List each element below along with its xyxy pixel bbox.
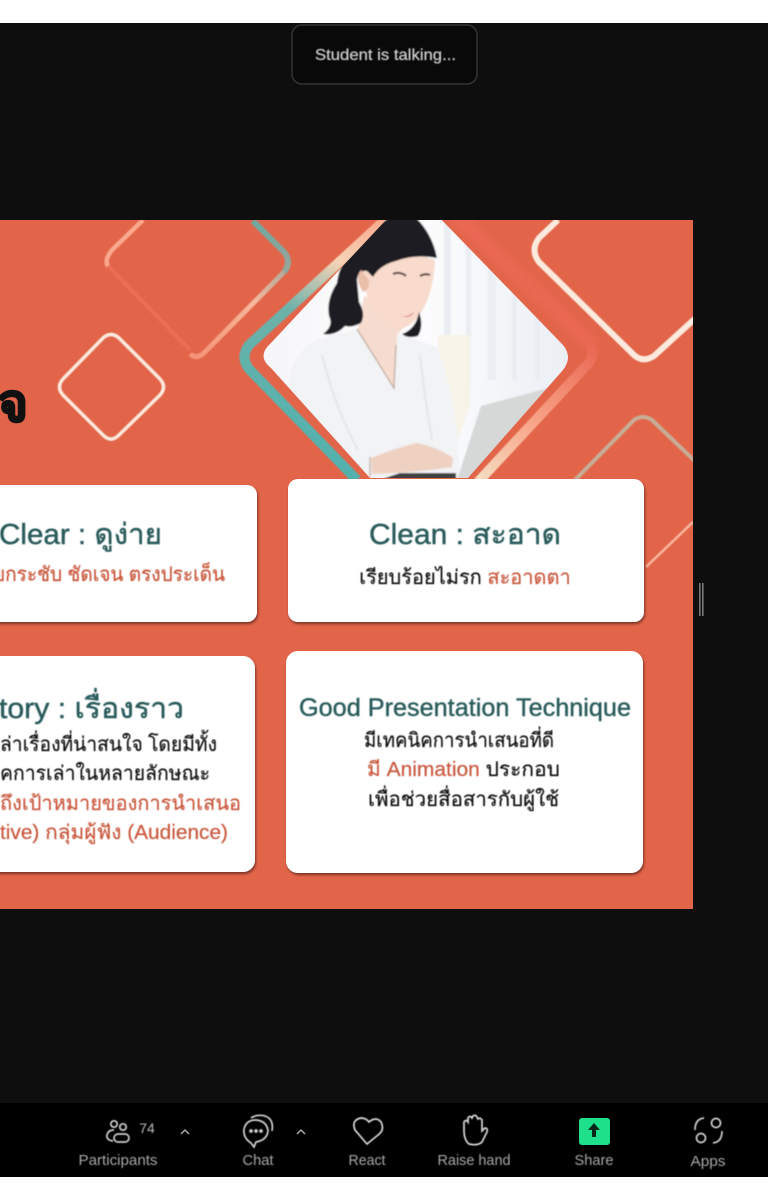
card text: Good Presentation heading: Good Presentation Technique — [299, 694, 631, 722]
panel resize handle — [699, 583, 704, 616]
decorative tile: small outlined diamond — [60, 334, 164, 439]
photo frame strip: teal and gold — [244, 220, 385, 480]
decorative tile: upper left diamond — [107, 220, 288, 357]
decorative faint line — [646, 522, 693, 567]
photo frame strip: coral and gold — [478, 345, 592, 482]
participant count: 74 — [139, 1120, 155, 1136]
toolbar labels — [78, 1152, 726, 1170]
card text: Clear body: ยกระชับ ชัดเจน ตรงประเด็น — [0, 561, 225, 586]
icon: raise hand — [464, 1115, 487, 1145]
speaking indicator — [292, 25, 477, 84]
card text: Story body: ถึงเป้าหมายของการนำเสนอ — [0, 793, 241, 815]
card text: Good Presentation body: มี Animation ประกอบ — [367, 759, 560, 781]
icon: participants menu caret — [181, 1130, 189, 1134]
card: Story — [0, 656, 255, 872]
icon: react heart — [354, 1118, 382, 1144]
coral band beside photo — [455, 215, 592, 345]
card text: Clean body: เรียบร้อยไม่รก สะอาดตา — [359, 566, 571, 589]
card text: Clear heading: Clear : ดูง่าย — [0, 519, 162, 552]
icon: participants — [107, 1121, 129, 1142]
card text: Story body — [0, 730, 241, 845]
icon: apps — [695, 1118, 722, 1143]
laptop — [457, 387, 552, 480]
woman's blouse — [336, 330, 458, 478]
decorative tile: top right outline — [534, 220, 700, 359]
icon: chat — [244, 1115, 272, 1147]
card text: Story body: ล่าเรื่องที่น่าสนใจ โดยมีทั้ง — [0, 730, 217, 756]
card text: Good Presentation body: เพื่อช่วยสื่อสารกับผู้ใช้ — [368, 785, 559, 812]
speaking indicator: Student is talking... — [315, 47, 456, 64]
slide — [0, 190, 700, 909]
photo: woman with laptop — [264, 220, 568, 478]
icon: share — [579, 1118, 610, 1145]
woman's head — [360, 254, 435, 329]
card text: Story body: tive) กลุ่มผู้ฟัง (Audience) — [0, 822, 228, 845]
card: Clear — [0, 485, 257, 622]
card text: Story heading: tory : เรื่องราว — [0, 688, 184, 725]
card: Clean — [288, 479, 644, 622]
toolbar labels: Chat — [242, 1152, 274, 1169]
icon: chat menu caret — [297, 1130, 305, 1134]
card text: Clean heading: Clean : สะอาด — [369, 519, 561, 551]
card text: Story body: คการเล่าในหลายลักษณะ — [0, 762, 210, 785]
woman's neck — [358, 296, 403, 386]
toolbar labels: Raise hand — [438, 1152, 510, 1169]
woman's hair — [323, 215, 437, 334]
toolbar — [0, 1103, 768, 1177]
card text: Good Presentation body: มีเทคนิคการนำเสนอที่ดี — [364, 726, 554, 752]
woman's hands — [371, 443, 453, 474]
toolbar labels: Share — [574, 1152, 614, 1169]
toolbar labels: Apps — [690, 1153, 726, 1170]
decorative tile: lower right outline — [575, 417, 700, 480]
card: Good Presentation Technique — [286, 651, 643, 873]
toolbar labels: Participants — [78, 1152, 158, 1169]
toolbar labels: React — [348, 1152, 386, 1169]
card text: Good Presentation body — [364, 726, 560, 812]
